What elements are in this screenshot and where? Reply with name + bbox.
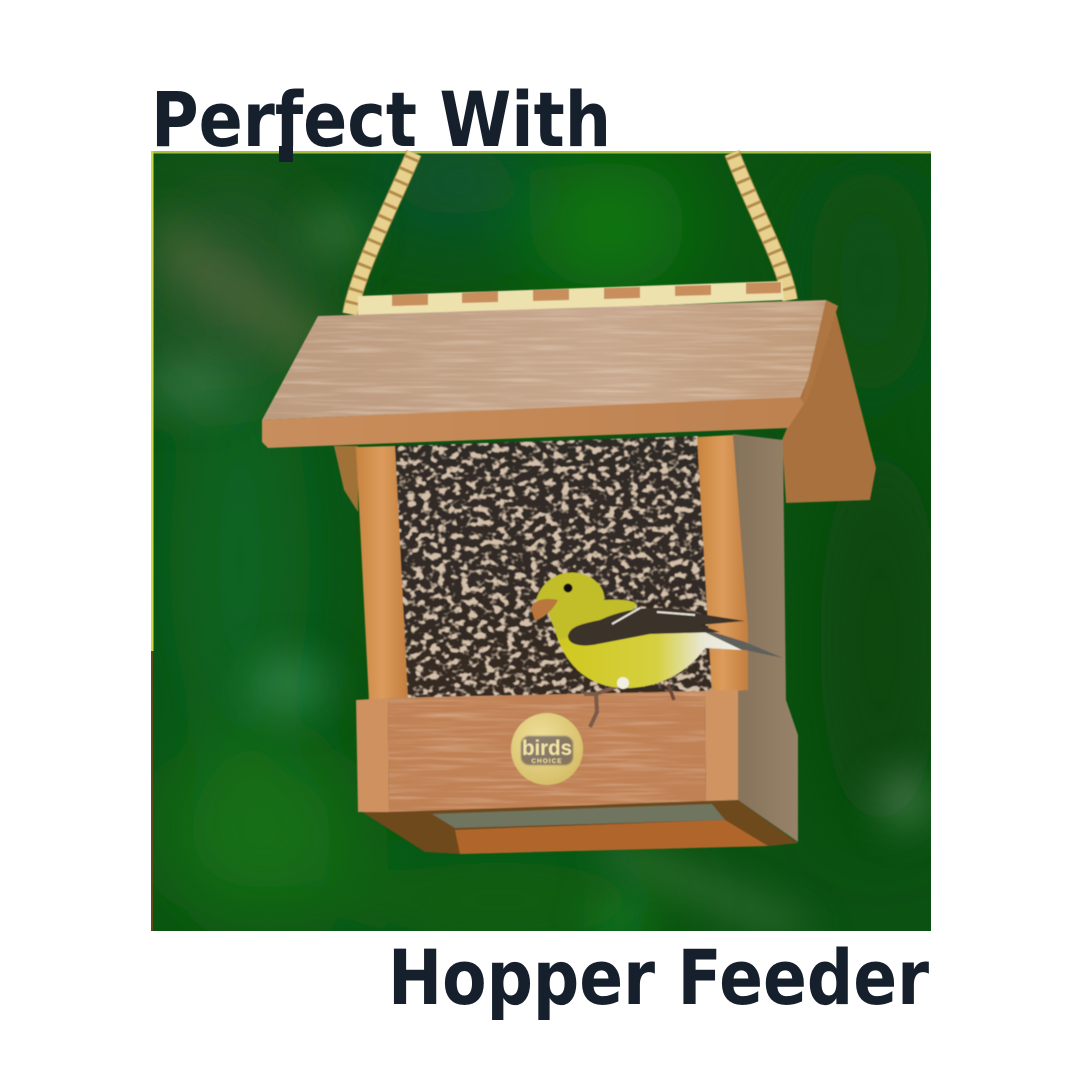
title: Perfect With: Perfect With [151,75,611,164]
legs [584,686,618,727]
body [552,600,742,688]
beak [531,599,558,621]
roof side edge [790,300,838,422]
front tray board [356,690,738,812]
side wall [733,434,798,842]
right post [697,435,748,693]
roof front edge [262,397,804,448]
photo edge highlight [151,151,931,931]
title: Hopper Feeder: Hopper Feeder [388,933,929,1022]
left post [356,446,408,701]
brand badge: birds [522,737,572,760]
roof back panel [782,312,876,503]
hanging rope: left [350,153,414,314]
brass hinge [358,281,784,318]
roof top [262,300,838,420]
tail feather [700,628,783,658]
wing [568,608,745,646]
hanging rope: right [732,153,790,300]
title descender: letter f stem [279,146,293,162]
under tail patch [617,677,629,689]
feeder bottom tray [362,800,798,854]
goldfinch bird [531,572,783,727]
feeder illustration [262,153,876,854]
eye [564,584,572,592]
brand badge [511,713,583,785]
photo: blurred green garden background [140,140,940,940]
brand badge: CHOICE [531,758,563,765]
seed window [395,436,712,699]
left back roof sliver [334,446,358,512]
head [536,572,636,640]
